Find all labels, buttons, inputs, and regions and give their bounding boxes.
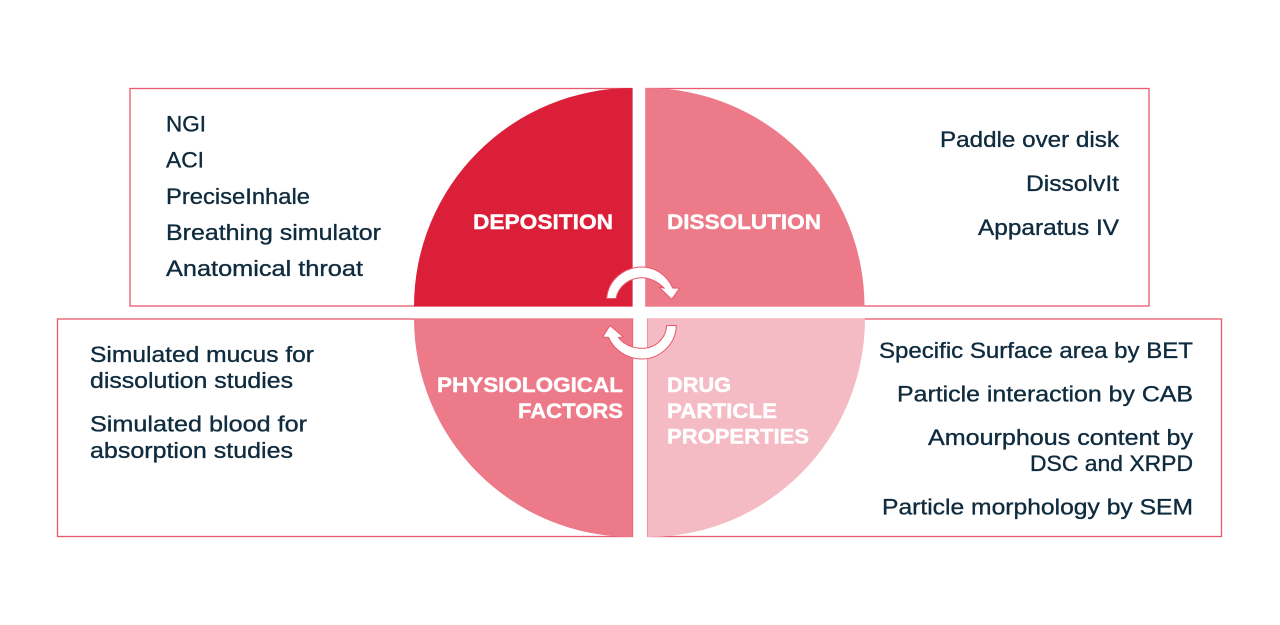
list: characterisation methods [879, 338, 1193, 520]
panel: deposition [130, 88, 632, 306]
panel: dissolution [646, 88, 1149, 306]
arrow: top cycle [607, 267, 680, 299]
quadrant: physiological factors [414, 318, 632, 537]
heading: drug particle properties [667, 374, 809, 448]
list: deposition methods [166, 112, 381, 281]
heading: drug particle properties: PROPERTIES [667, 426, 809, 448]
heading: physiological factors: PHYSIOLOGICAL [437, 374, 623, 397]
list: characterisation methods: Specific Surface area by BET [879, 338, 1193, 363]
heading: deposition: DEPOSITION [473, 211, 613, 234]
list: deposition methods: ACI [166, 148, 204, 173]
list: deposition methods: Breathing simulator [166, 220, 381, 245]
list: dissolution methods [940, 127, 1120, 240]
quadrant: dissolution [646, 88, 864, 306]
list: deposition methods: PreciseInhale [166, 184, 310, 209]
list: simulated fluids [90, 342, 314, 463]
list: dissolution methods: Apparatus IV [978, 215, 1119, 240]
list: simulated fluids: Simulated blood for [90, 412, 307, 436]
list: dissolution methods: DissolvIt [1026, 171, 1119, 196]
heading: physiological factors: FACTORS [518, 400, 623, 423]
arrow: bottom cycle [603, 326, 676, 359]
list: deposition methods: NGI [166, 112, 206, 136]
panel: physiological factors [58, 318, 632, 537]
heading: drug particle properties: PARTICLE [667, 400, 777, 423]
list: simulated fluids: Simulated mucus for [90, 342, 314, 367]
quadrant: deposition [414, 88, 632, 306]
list: characterisation methods: Particle interaction by CAB [897, 382, 1193, 407]
list: characterisation methods: Amourphous content by [928, 425, 1193, 450]
quadrant: drug particle properties [648, 318, 865, 537]
list: characterisation methods: Particle morphology by SEM [882, 494, 1193, 520]
heading: physiological factors [437, 374, 623, 423]
list: characterisation methods: DSC and XRPD [1030, 451, 1193, 476]
list: simulated fluids: dissolution studies [90, 368, 293, 393]
list: deposition methods: Anatomical throat [166, 256, 363, 281]
heading: drug particle properties: DRUG [667, 374, 731, 397]
list: dissolution methods: Paddle over disk [940, 127, 1120, 152]
panel: drug particle properties [648, 318, 1222, 537]
heading: dissolution: DISSOLUTION [667, 211, 821, 234]
list: simulated fluids: absorption studies [90, 438, 293, 463]
